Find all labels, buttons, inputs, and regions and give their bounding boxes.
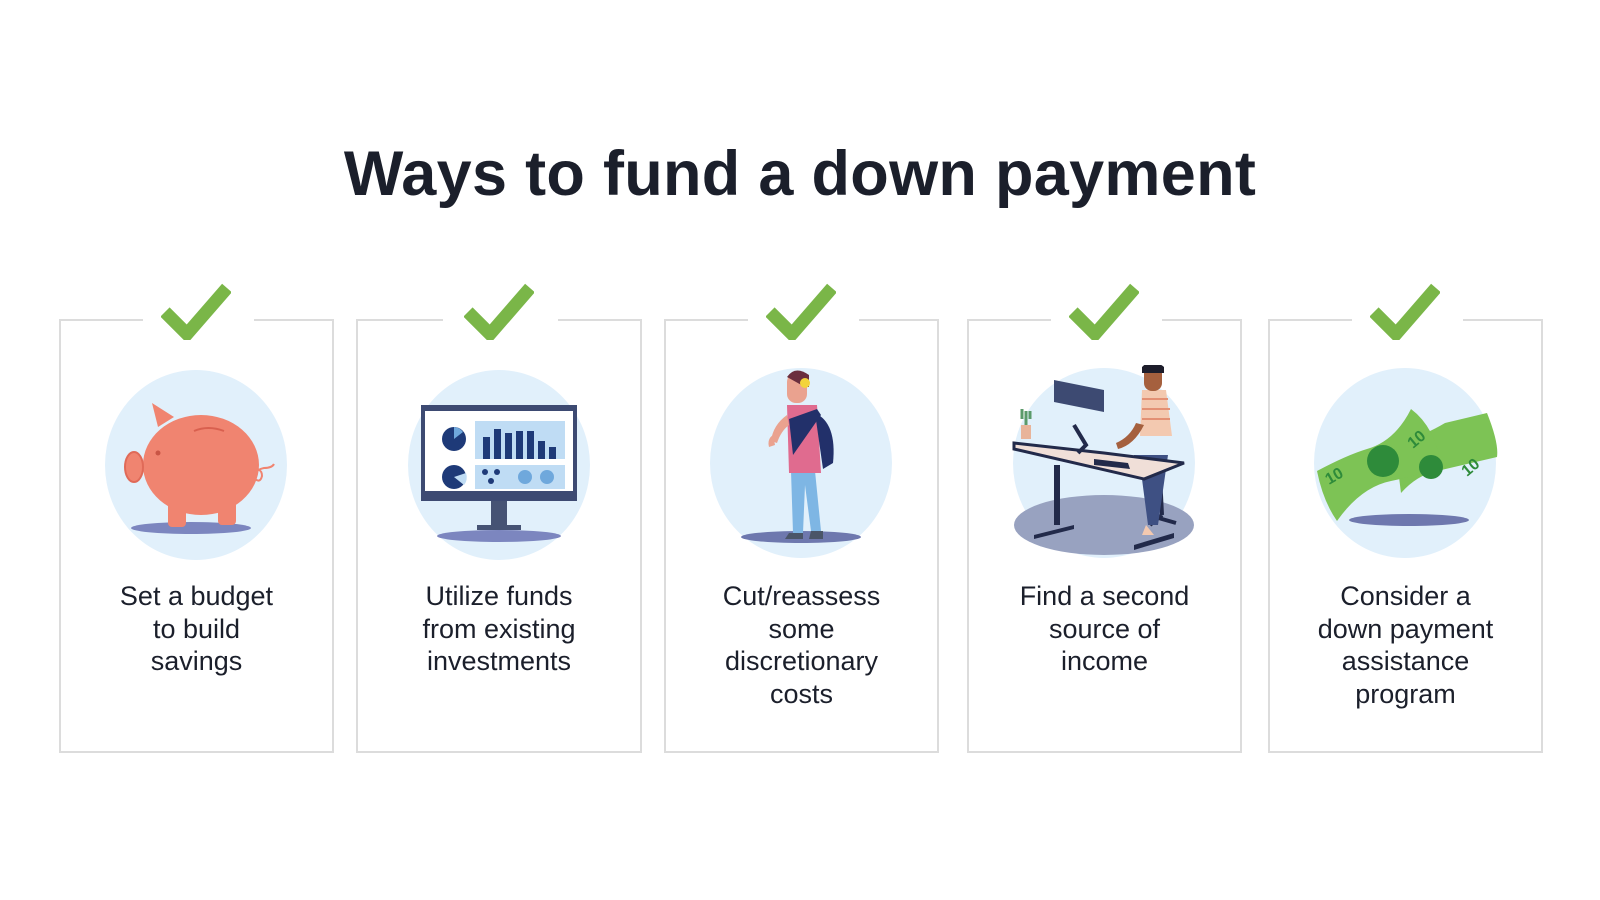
title: Ways to fund a down payment	[344, 139, 1256, 209]
icon: money bills: 10	[1459, 456, 1483, 480]
text: assistance: assistance	[1342, 646, 1469, 676]
icon: check 1	[161, 284, 231, 340]
panel: cut costs	[664, 319, 939, 753]
text: investments	[422, 581, 576, 676]
panel: investments	[356, 319, 642, 753]
text: assistance: down payment	[1318, 614, 1493, 644]
icon: piggy bank	[105, 370, 287, 560]
icon: check 5	[1370, 284, 1440, 340]
text: cut costs	[723, 581, 880, 708]
text: second income: source of	[1049, 614, 1160, 644]
text: assistance: program	[1355, 678, 1456, 708]
text: budget: Set a budget	[120, 581, 273, 611]
text: budget	[120, 581, 273, 676]
text: investments: investments	[427, 646, 571, 676]
icon: check 3	[766, 284, 836, 340]
icon: check 4	[1069, 284, 1139, 340]
icon: money bills	[1314, 368, 1498, 558]
text: investments: from existing	[422, 614, 576, 644]
text: cut costs: some	[768, 614, 835, 644]
text: second income	[1020, 581, 1189, 676]
icon: standing desk worker	[1012, 365, 1195, 558]
text: budget: savings	[151, 646, 242, 676]
text: cut costs: discretionary	[725, 646, 878, 676]
icon: money bills: 10	[1322, 465, 1347, 488]
text: second income: Find a second	[1020, 581, 1189, 611]
panel: second income	[967, 319, 1242, 753]
text: assistance: Consider a	[1340, 581, 1471, 611]
icon: monitor	[408, 370, 590, 560]
icon: money bills: 10	[1405, 428, 1429, 452]
text: cut costs: costs	[770, 678, 833, 708]
panel: assistance	[1268, 319, 1543, 753]
text: cut costs: Cut/reassess	[723, 581, 880, 611]
icon: person with headphones	[710, 368, 892, 558]
text: investments: Utilize funds	[425, 581, 573, 611]
text: second income: income	[1061, 646, 1148, 676]
text: budget: to build	[153, 614, 240, 644]
text: assistance	[1318, 581, 1494, 708]
icon: check 2	[464, 284, 534, 340]
panel: budget	[59, 319, 334, 753]
